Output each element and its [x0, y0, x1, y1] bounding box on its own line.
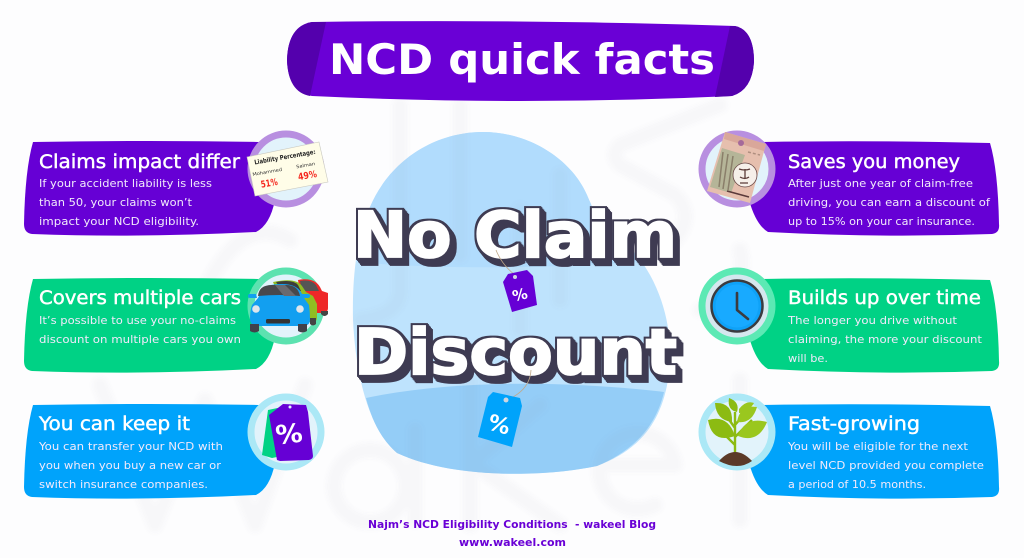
card: saves you money: Saves you money — [788, 152, 960, 173]
card: fast-growing — [749, 404, 999, 499]
card: covers multiple cars — [24, 278, 275, 373]
icon: purple hanging tag — [496, 250, 537, 312]
footer website: www.wakeel.com — [459, 536, 566, 549]
card: builds up over time: claiming, the more your discount — [788, 333, 983, 346]
footer source line: Najm’s NCD Eligibility Conditions - wakeel Blog — [368, 518, 656, 531]
icon: purple hanging tag: % — [510, 284, 530, 306]
icon: liability paper: 51% — [260, 177, 279, 191]
icon: plant — [702, 397, 772, 467]
card: claims impact differ — [24, 141, 275, 236]
card: covers multiple cars: discount on multiple cars you own — [39, 333, 241, 346]
red car — [298, 279, 328, 313]
card: you can keep it: You can transfer your NCD with — [38, 440, 223, 453]
card: fast-growing: Fast-growing — [788, 414, 920, 435]
card: fast-growing: You will be eligible for the next — [787, 440, 969, 453]
blue car — [250, 284, 310, 326]
card: claims impact differ: Claims impact differ — [39, 152, 240, 173]
card: fast-growing: level NCD provided you complete — [788, 459, 984, 472]
card: claims impact differ: impact your NCD eligibility. — [39, 215, 199, 228]
icon: cars — [248, 271, 328, 341]
headline: Discount: Discount — [354, 316, 677, 389]
card: you can keep it: switch insurance companies. — [39, 478, 208, 491]
card: builds up over time: Builds up over time — [788, 288, 981, 309]
icon: liability paper: Mohammed — [252, 167, 283, 178]
card: you can keep it: you when you buy a new car or — [39, 459, 221, 472]
card: claims impact differ: than 50, your claims won’t — [39, 196, 193, 209]
card: builds up over time: The longer you drive without — [787, 314, 958, 327]
card: saves you money: After just one year of claim-free — [788, 177, 973, 190]
icon: clock — [702, 271, 772, 341]
card: you can keep it: You can keep it — [38, 414, 190, 435]
icon: liability paper: Liability Percentage: — [254, 148, 316, 167]
card: saves you money — [749, 141, 999, 236]
green car — [273, 280, 317, 322]
icon: discount tags: % — [274, 419, 304, 451]
icon: discount tags — [251, 397, 321, 467]
icon: blue hanging tag: % — [485, 410, 513, 441]
card: builds up over time: will be. — [788, 352, 828, 365]
card: covers multiple cars: It’s possible to use your no-claims — [39, 314, 236, 327]
card: saves you money: driving, you can earn a discount of — [788, 196, 991, 209]
card: builds up over time — [749, 278, 999, 373]
icon: liability paper: Salman — [296, 161, 316, 170]
icon: banknote — [702, 132, 772, 204]
icon: blue hanging tag — [478, 370, 531, 447]
headline: No Claim: No Claim — [353, 199, 677, 272]
watermark logo — [100, 105, 742, 525]
central blob — [353, 132, 670, 474]
card: fast-growing: a period of 10.5 months. — [788, 478, 926, 491]
icon: liability paper — [247, 134, 328, 204]
card: covers multiple cars: Covers multiple cars — [39, 288, 241, 309]
title banner — [287, 21, 754, 101]
title text: NCD quick facts — [329, 35, 715, 84]
card: saves you money: up to 15% on your car insurance. — [788, 215, 975, 228]
card: you can keep it — [24, 404, 275, 499]
icon: liability paper: 49% — [297, 169, 318, 183]
card: claims impact differ: If your accident liability is less — [39, 177, 212, 190]
